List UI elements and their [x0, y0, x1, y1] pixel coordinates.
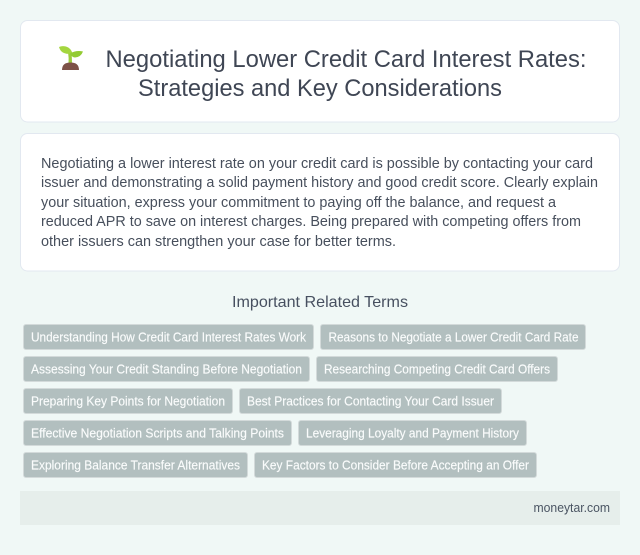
intro text: Negotiating a lower interest rate on your credit card is possible by contacting your card [41, 156, 593, 172]
tag: Reasons to Negotiate a Lower Credit Card Rate [328, 330, 578, 344]
tag: Assessing Your Credit Standing Before Negotiation [31, 362, 302, 376]
heading: related terms: Important Related Terms [232, 294, 408, 311]
intro text: your situation, express your commitment to paying off the balance, and request a [41, 195, 557, 211]
footer [20, 491, 620, 525]
tag: Best Practices for Contacting Your Card Issuer [247, 394, 494, 408]
title: Negotiating Lower Credit Card Interest Rates: [106, 46, 586, 73]
tag: Preparing Key Points for Negotiation [31, 394, 225, 408]
tag [316, 356, 558, 382]
source credit: moneytar.com [534, 501, 610, 515]
intro text: reduced APR to save on interest charges. Being prepared with competing offers from [41, 214, 581, 230]
tag: Researching Competing Credit Card Offers [324, 362, 550, 376]
title: Strategies and Key Considerations [138, 75, 502, 102]
tag: Effective Negotiation Scripts and Talking Points [31, 426, 284, 440]
tag [24, 324, 314, 350]
tag [24, 420, 292, 446]
tag: Understanding How Credit Card Interest Rates Work [31, 330, 307, 344]
intro text [41, 156, 598, 250]
icon: seedling [59, 46, 83, 70]
intro text: other issuers can strengthen your case for better terms. [41, 234, 396, 250]
tag [320, 324, 586, 350]
tag [240, 388, 502, 414]
tag [24, 388, 232, 414]
tag: Key Factors to Consider Before Accepting an Offer [262, 458, 529, 472]
related term tags [24, 324, 586, 478]
tag [298, 420, 526, 446]
tag [254, 452, 536, 478]
panel: intro paragraph [20, 134, 620, 271]
tag [24, 452, 248, 478]
tag [24, 356, 310, 382]
panel: title card [20, 20, 620, 122]
intro text: issuer and demonstrating a solid payment history and good credit score. Clearly explain [41, 175, 598, 191]
tag: Exploring Balance Transfer Alternatives [31, 458, 240, 472]
tag: Leveraging Loyalty and Payment History [306, 426, 520, 440]
title [106, 46, 586, 102]
